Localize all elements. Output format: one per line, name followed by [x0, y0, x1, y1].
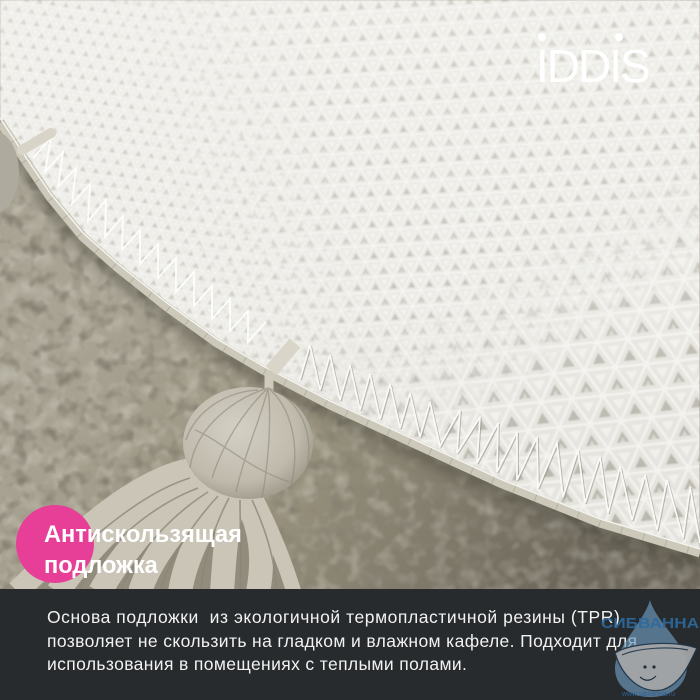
- watermark bath: [615, 643, 697, 691]
- badge title: Антискользящая: [44, 522, 242, 548]
- mat shadow: [0, 132, 700, 561]
- badge: anti-slip backing: [16, 505, 242, 583]
- stitched edge: zigzag shadow: [301, 346, 700, 544]
- logo dots: [538, 33, 546, 41]
- stitched edge: zigzag section: [300, 345, 700, 543]
- mat rim: [0, 118, 700, 553]
- logo: iddis: iddis: [536, 22, 649, 96]
- description text: [47, 607, 637, 674]
- watermark drop: [615, 600, 687, 697]
- stitched edge: left fine section: [33, 138, 266, 342]
- panel: description: [0, 589, 700, 700]
- watermark url: www.sibvanna.ru: [621, 691, 675, 698]
- tassel: strands: [0, 463, 300, 592]
- tassel: ball: [183, 387, 313, 499]
- badge title: подложка: [44, 553, 158, 579]
- description text: позволяет не скользить на гладком и влажном кафеле. Подходит для: [47, 630, 637, 650]
- left tab: [22, 133, 51, 150]
- description text: использования в помещениях с теплыми полами.: [47, 654, 467, 674]
- badge circle: [16, 505, 94, 583]
- tassel: cord tab: [269, 343, 295, 392]
- watermark name: СИБВАННА: [601, 615, 699, 632]
- left tassel ball: [0, 130, 19, 214]
- badge title: [44, 522, 242, 579]
- watermark: bath in water drop: [601, 600, 699, 698]
- description text: Основа подложки из экологичной термопластичной резины (TPR): [47, 607, 620, 627]
